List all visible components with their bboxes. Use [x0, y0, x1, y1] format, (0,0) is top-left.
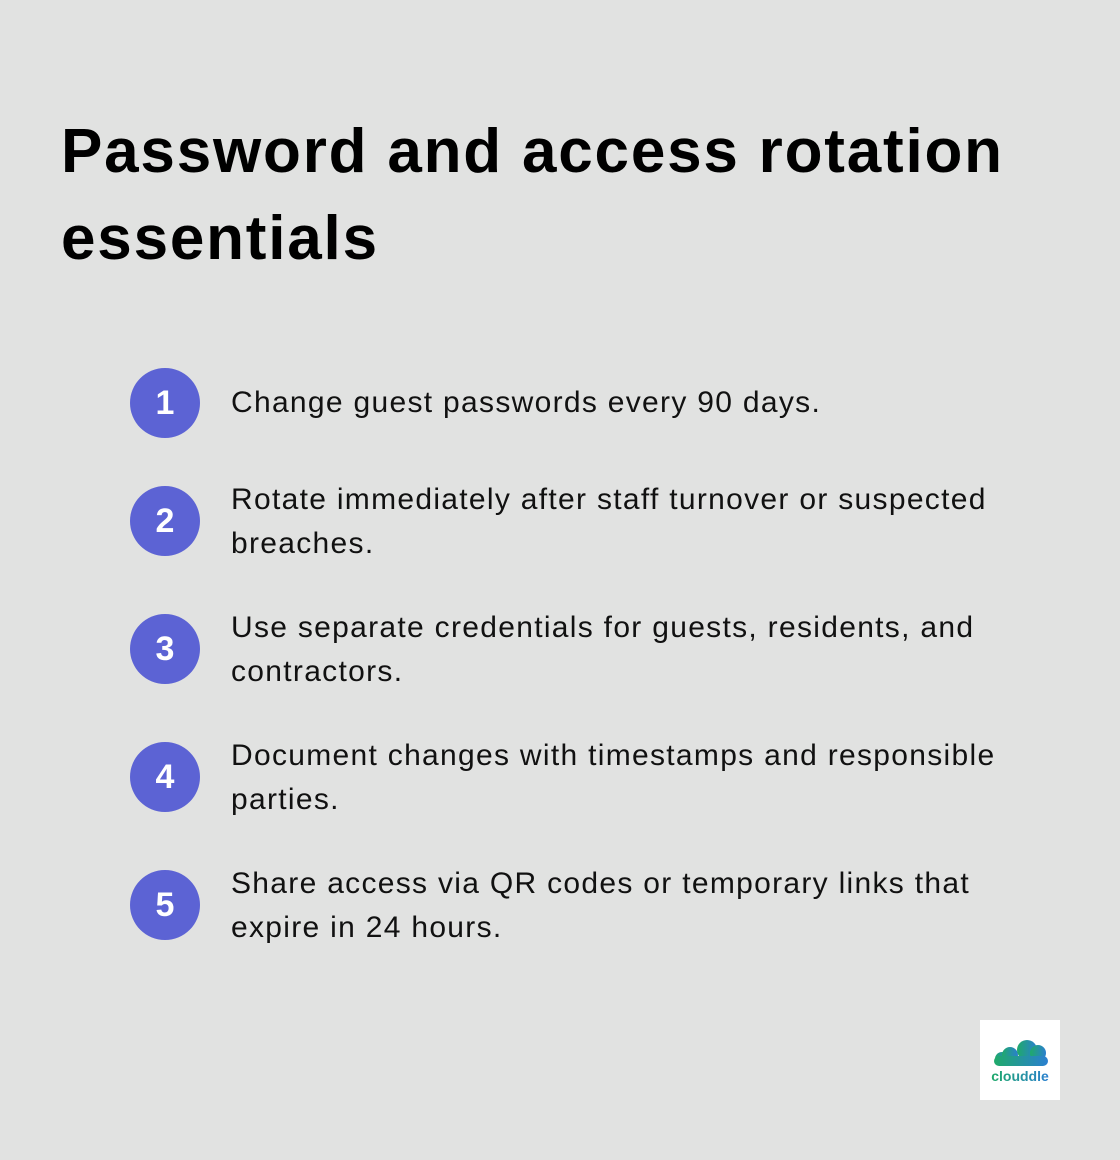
- item 1: 1: [156, 384, 174, 422]
- item 4: Document changes with timestamps and responsible: [231, 739, 995, 772]
- title: [61, 117, 1004, 273]
- item 4: parties.: [231, 783, 340, 816]
- item 5: 5: [156, 886, 174, 924]
- logo: clouddle: [991, 1068, 1049, 1084]
- item 4: [130, 739, 995, 816]
- logo: [980, 1020, 1060, 1100]
- item 3: 3: [156, 630, 174, 668]
- item 1: Change guest passwords every 90 days.: [231, 386, 821, 419]
- item 3: Use separate credentials for guests, residents, and: [231, 611, 974, 644]
- item 2: [130, 483, 987, 560]
- item 2: 2: [156, 502, 174, 540]
- item 2: Rotate immediately after staff turnover or suspected: [231, 483, 987, 516]
- title: essentials: [61, 204, 379, 273]
- title: Password and access rotation: [61, 117, 1004, 186]
- item 2: breaches.: [231, 527, 374, 560]
- item 5: [130, 867, 970, 944]
- item 1: [130, 368, 821, 438]
- item 5: expire in 24 hours.: [231, 911, 503, 944]
- item 3: contractors.: [231, 655, 403, 688]
- item 4: 4: [156, 758, 174, 796]
- item 3: [130, 611, 974, 688]
- item 5: Share access via QR codes or temporary links that: [231, 867, 970, 900]
